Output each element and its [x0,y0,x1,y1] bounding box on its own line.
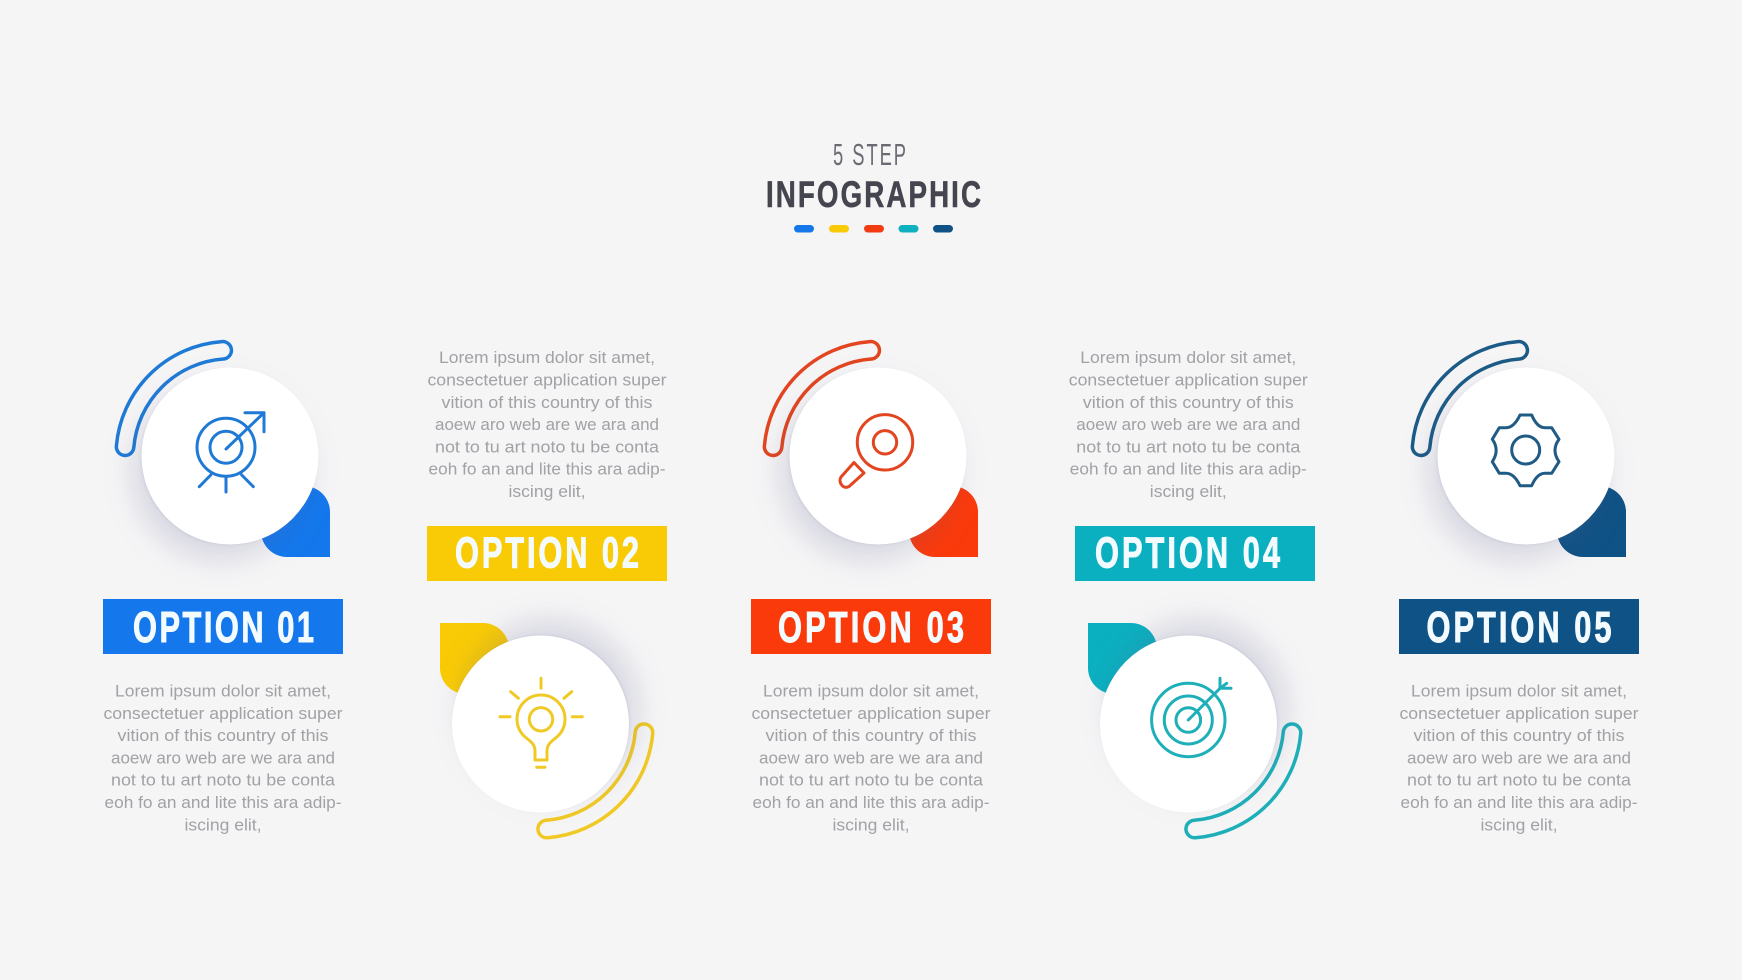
text block: option 01: consectetuer application super [104,704,343,723]
badge: navy corner shape [1557,486,1626,557]
text block: option 03 [752,682,991,834]
text block: option 05: eoh fo an and lite this ara adip- [1400,793,1638,812]
badge: yellow corner shape [440,623,509,694]
text block: option 02: vition of this country of this [442,393,652,412]
text block: option 03: iscing elit, [832,815,910,834]
badge: blue corner shape [261,486,330,557]
label bar: option 03: OPTION 03 [778,604,964,652]
panel: option 02 [427,348,667,829]
label bar: option 01: OPTION 01 [133,604,314,652]
text block: option 05: not to tu art noto tu be conta [1407,771,1632,790]
badge: teal corner shape [1088,623,1157,694]
arc: blue capsule [125,350,223,447]
text block: option 04: aoew aro web are we ara and [1076,415,1300,434]
text block: option 03: consectetuer application super [752,704,991,723]
icon: target with arrow [197,413,264,492]
label bar: option 02 [427,526,667,581]
text block: option 05 [1400,682,1639,834]
white circle [1100,636,1277,812]
text block: option 02: eoh fo an and lite this ara adip- [428,460,666,479]
text block: option 02: iscing elit, [508,482,586,501]
text block: option 04: vition of this country of this [1083,393,1294,412]
panel: option 01 [103,350,343,834]
text block: option 05: vition of this country of this [1414,726,1624,745]
text block: option 04: consectetuer application super [1069,370,1308,390]
text block: option 02: not to tu art noto tu be conta [435,437,660,456]
title [766,138,981,215]
text block: option 04: Lorem ipsum dolor sit amet, [1080,348,1296,367]
label bar: option 04 [1075,526,1315,581]
text block: option 04: iscing elit, [1150,482,1227,501]
label bar: option 04: OPTION 04 [1095,529,1280,578]
title: 5 STEP [833,138,906,172]
text block: option 04: not to tu art noto tu be conta [1076,437,1301,456]
label bar: option 05 [1399,599,1639,654]
text block: option 03: Lorem ipsum dolor sit amet, [763,682,979,700]
text block: option 01: Lorem ipsum dolor sit amet, [115,682,331,700]
arc: red capsule [773,350,871,447]
colour key dashes [794,225,953,232]
text block: option 03: eoh fo an and lite this ara adip- [752,793,990,812]
badge: red corner shape [909,486,978,557]
icon: magnifier [840,415,913,487]
text block: option 02: Lorem ipsum dolor sit amet, [439,348,655,367]
label bar: option 02: OPTION 02 [455,529,639,578]
arc: yellow capsule [547,733,644,829]
label bar: option 05: OPTION 05 [1426,604,1612,652]
text block: option 01: vition of this country of this [118,726,328,745]
text block: option 03: aoew aro web are we ara and [759,748,983,767]
text block: option 01: eoh fo an and lite this ara adip- [104,793,342,812]
text block: option 02: aoew aro web are we ara and [435,415,659,434]
arc: navy capsule [1421,350,1519,447]
text block: option 02: consectetuer application super [428,370,667,390]
white circle [1438,368,1614,544]
icon: light bulb [500,678,582,767]
panel: option 04 [1069,348,1315,829]
white circle [452,636,629,812]
text block: option 04: eoh fo an and lite this ara adip- [1070,460,1307,479]
panel: option 03 [751,350,991,834]
label bar: option 01 [103,599,343,654]
text block: option 01: not to tu art noto tu be conta [111,771,336,790]
text block: option 05: consectetuer application super [1400,704,1639,723]
text block: option 04 [1069,348,1308,501]
text block: option 01 [104,682,343,834]
panel: option 05 [1399,350,1639,834]
white circle [790,368,966,544]
white circle [142,368,318,544]
text block: option 05: aoew aro web are we ara and [1407,748,1631,767]
text block: option 02 [428,348,667,501]
text block: option 05: Lorem ipsum dolor sit amet, [1411,682,1627,700]
text block: option 03: vition of this country of this [766,726,976,745]
icon: bullseye with dart [1152,678,1231,757]
label bar: option 03 [751,599,991,654]
text block: option 05: iscing elit, [1480,815,1558,834]
text block: option 01: aoew aro web are we ara and [111,748,335,767]
icon: gear [1492,415,1559,486]
arc: teal capsule [1195,733,1292,829]
text block: option 03: not to tu art noto tu be conta [759,771,984,790]
text block: option 01: iscing elit, [184,815,262,834]
title: INFOGRAPHIC [766,173,981,215]
